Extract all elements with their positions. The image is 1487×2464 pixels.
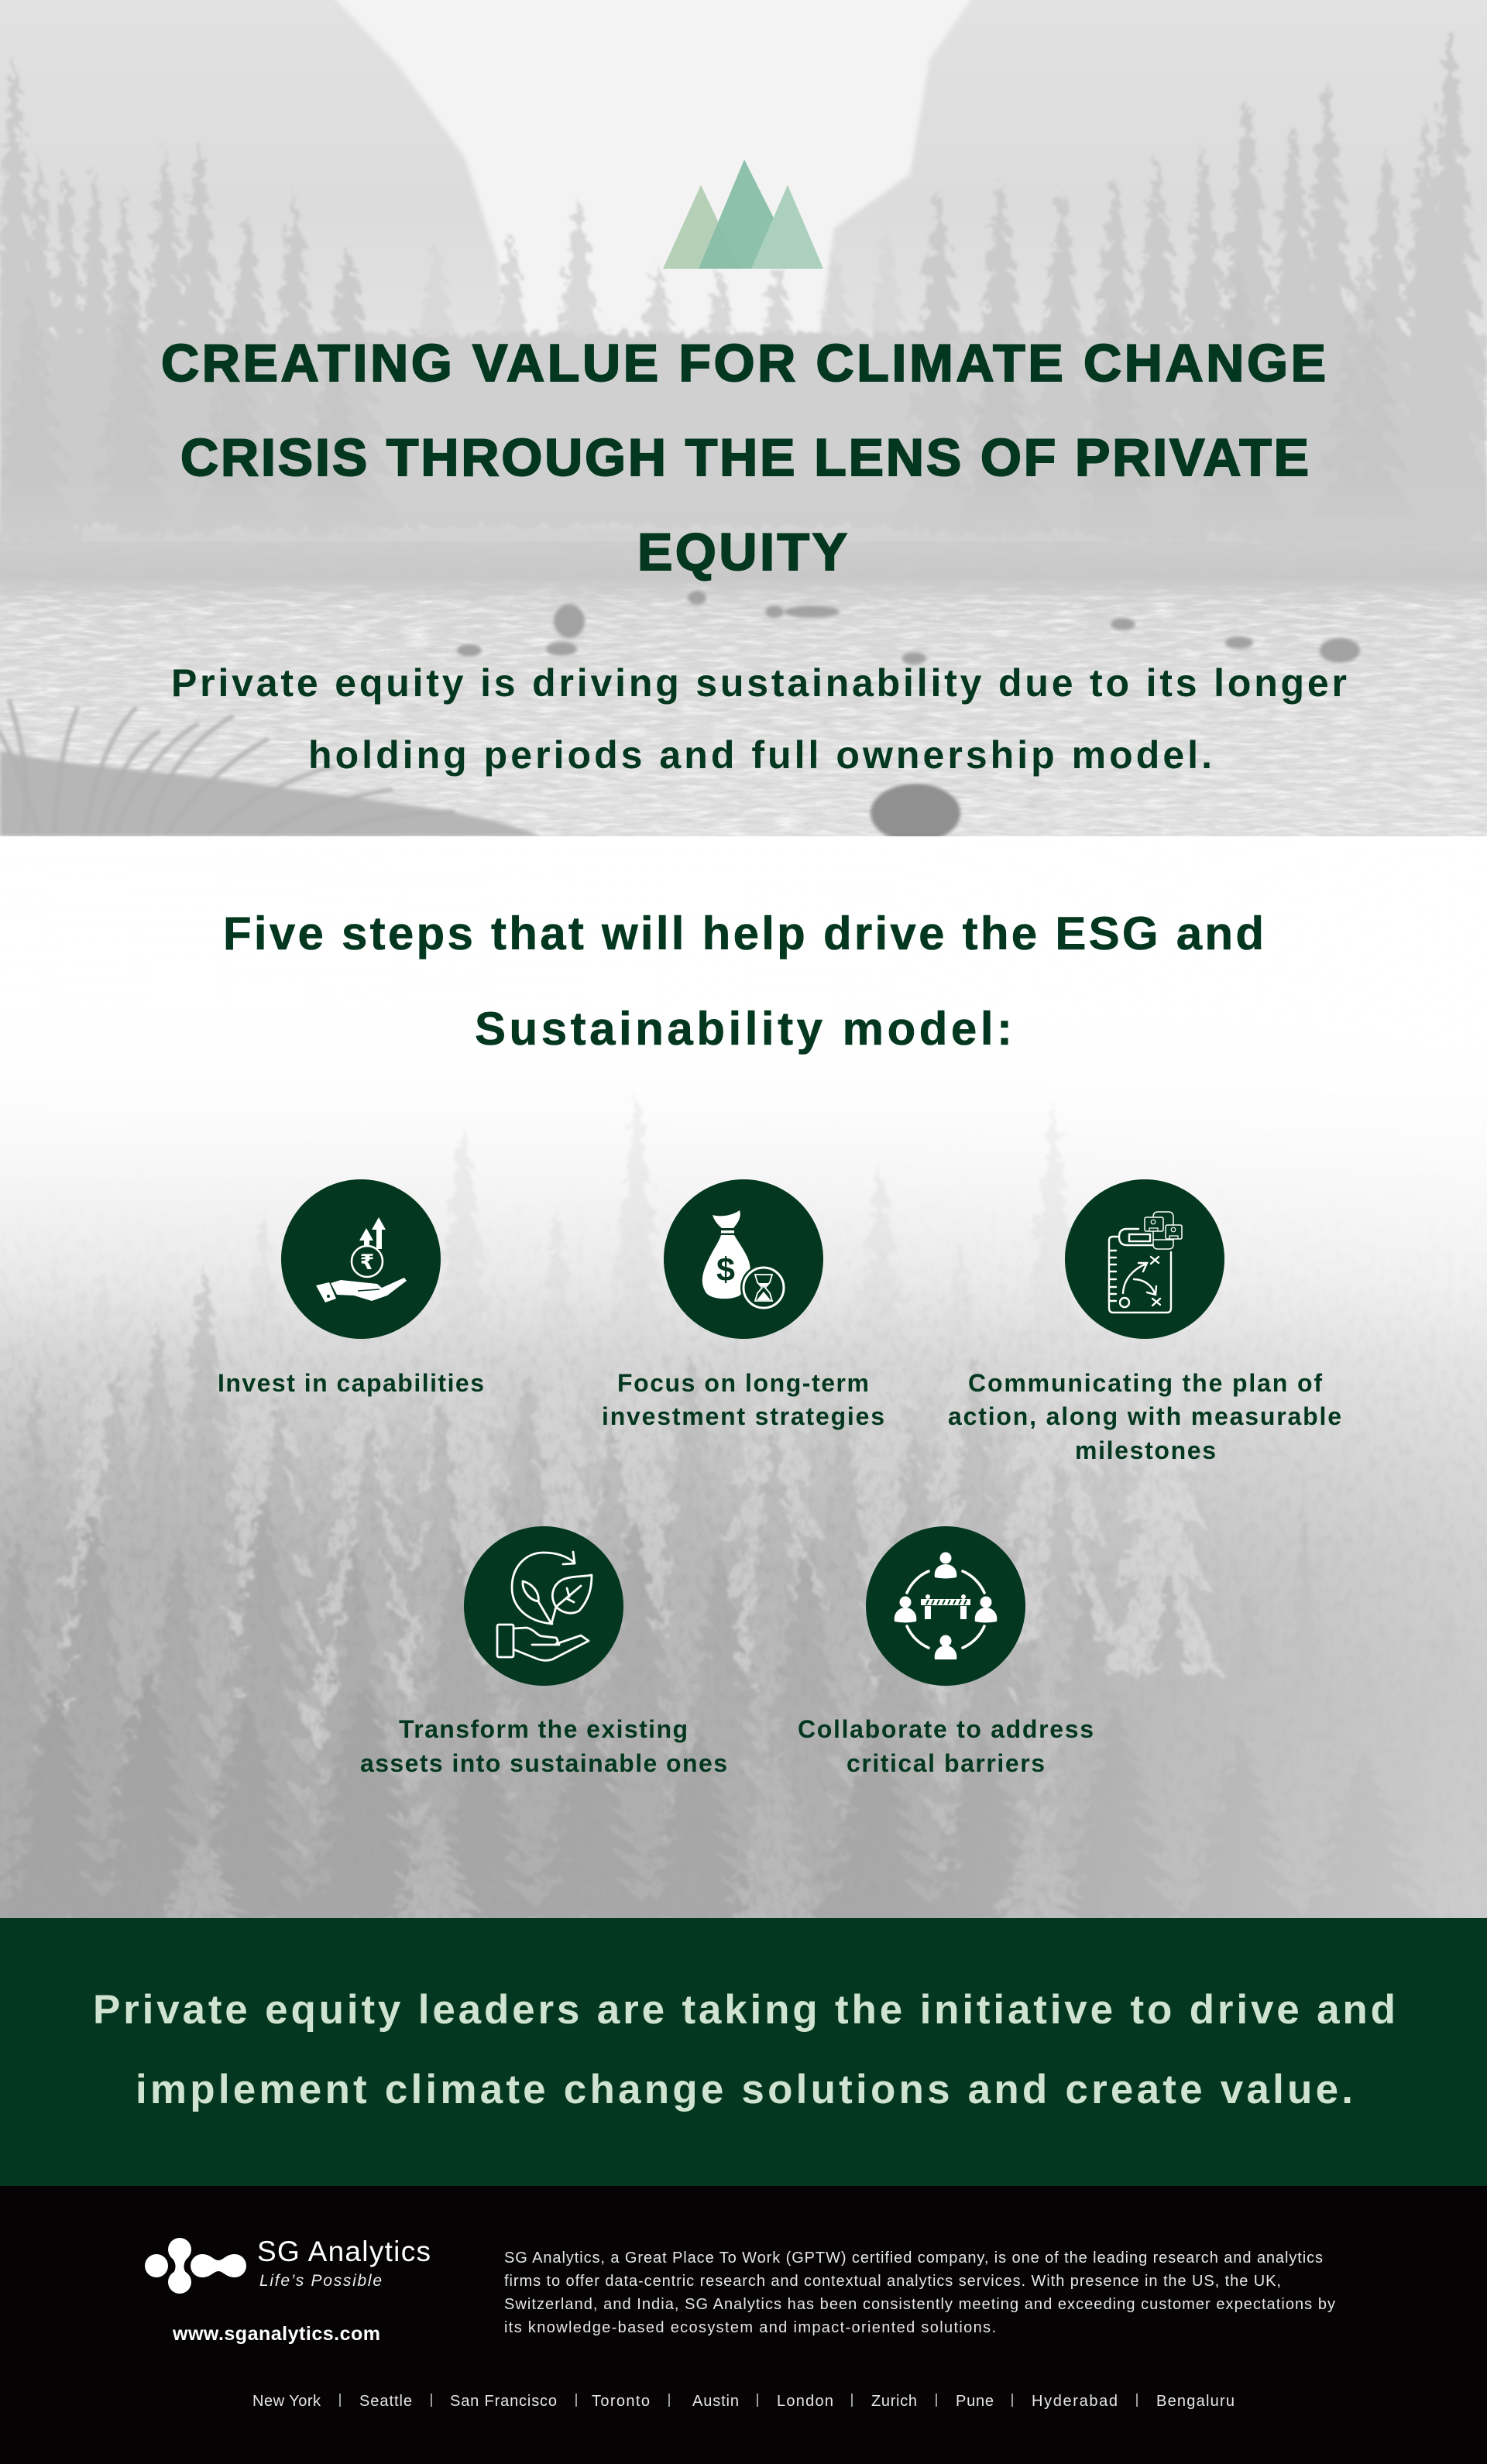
label: action, along with measurable (948, 1402, 1341, 1430)
icon: hand with rupee coin and arrows (281, 1179, 441, 1339)
subtitle text: Private equity is driving sustainability due to its longer (171, 661, 1347, 705)
step 1: invest in capabilities (218, 1179, 484, 1397)
icon: four people around a barrier (866, 1526, 1025, 1686)
heading: five steps (223, 908, 1264, 1055)
icon: clipboard plan with chat devices (1065, 1179, 1224, 1339)
office cities: Seattle (359, 2393, 412, 2410)
label: Invest in capabilities (218, 1369, 484, 1397)
logo wordmark: SG Analytics (257, 2236, 431, 2267)
office cities: Toronto (592, 2393, 650, 2410)
title: CRISIS THROUGH THE LENS OF PRIVATE (180, 428, 1309, 487)
label (360, 1715, 727, 1777)
panel: green conclusion band (0, 1918, 1487, 2186)
heading: five steps: Sustainability model: (475, 1003, 1012, 1055)
conclusion text (93, 1987, 1396, 2112)
office cities (252, 2393, 1235, 2410)
subtitle text: holding periods and full ownership model. (308, 733, 1212, 777)
office cities: Hyderabad (1032, 2393, 1118, 2410)
office cities: New York (252, 2393, 321, 2410)
label: Focus on long-term (617, 1369, 869, 1397)
step 4: transform assets (360, 1526, 727, 1777)
label (948, 1369, 1341, 1464)
office cities: Zurich (871, 2393, 917, 2410)
office cities: Pune (956, 2393, 994, 2410)
label: critical barriers (847, 1749, 1045, 1777)
heading: five steps: Five steps that will help drive the ESG and (223, 908, 1264, 959)
icon: hand with rupee coin and arrows: ₹ (360, 1251, 374, 1275)
label: Transform the existing (399, 1715, 688, 1743)
company description: its knowledge-based ecosystem and impact-oriented solutions. (504, 2319, 996, 2336)
office cities: London (777, 2393, 833, 2410)
icon: SG Analytics logo mark (145, 2238, 246, 2294)
conclusion text: Private equity leaders are taking the initiative to drive and (93, 1987, 1396, 2033)
office cities: San Francisco (450, 2393, 557, 2410)
label (798, 1715, 1094, 1777)
icon: hand with leaves and cycle arrow (464, 1526, 623, 1686)
company description: Switzerland, and India, SG Analytics has been consistently meeting and exceeding customer expectations by (504, 2296, 1335, 2313)
title (161, 334, 1326, 582)
company description: firms to offer data-centric research and contextual analytics services. With presence in the US, the UK, (504, 2273, 1281, 2290)
icon: money bag with hourglass: $ (716, 1251, 735, 1289)
icon: money bag with hourglass (664, 1179, 823, 1339)
logo tagline: Life’s Possible (259, 2272, 382, 2290)
icon: mountain logo triangles (663, 160, 823, 269)
panel: forest background (0, 1097, 1487, 1918)
subtitle text (171, 661, 1347, 777)
website: www.sganalytics.com (172, 2323, 380, 2345)
step 5: collaborate (798, 1526, 1094, 1777)
office cities: Bengaluru (1156, 2393, 1235, 2410)
office cities: Austin (692, 2393, 739, 2410)
panel: hero landscape background (0, 0, 1487, 842)
label: assets into sustainable ones (360, 1749, 727, 1777)
company description: SG Analytics, a Great Place To Work (GPTW) certified company, is one of the leading research and analytics (504, 2250, 1323, 2267)
title: EQUITY (637, 523, 847, 582)
label: milestones (1075, 1436, 1216, 1464)
title: CREATING VALUE FOR CLIMATE CHANGE (161, 334, 1326, 393)
step 2: long-term investment (602, 1179, 884, 1430)
panel: black footer (0, 2186, 1487, 2464)
label: investment strategies (602, 1402, 884, 1430)
label: Collaborate to address (798, 1715, 1094, 1743)
step 3: communicating the plan (948, 1179, 1341, 1464)
label (602, 1369, 884, 1430)
conclusion text: implement climate change solutions and create value. (136, 2067, 1353, 2112)
label: Communicating the plan of (968, 1369, 1322, 1397)
company description (504, 2250, 1335, 2336)
